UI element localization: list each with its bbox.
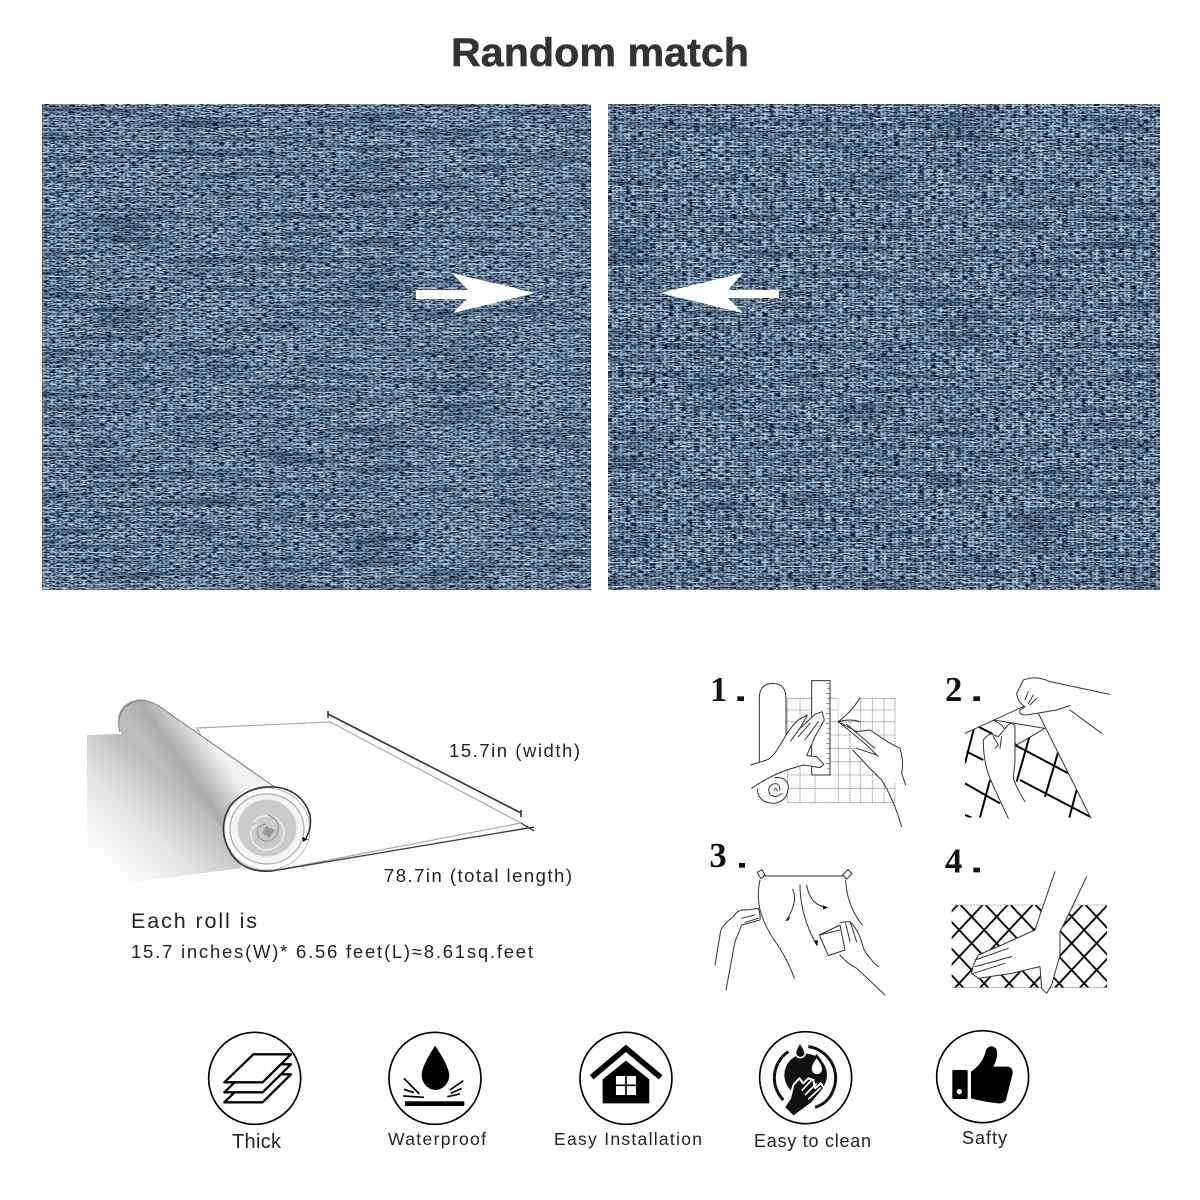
panel: left wallpaper swatch	[42, 104, 591, 590]
title: Random match	[451, 31, 749, 75]
step 3: smooth on wall: 3	[709, 837, 727, 875]
text block: roll size: Each roll is	[131, 909, 257, 933]
step 1: measure and cut: 1	[710, 671, 727, 709]
step 1: measure and cut	[710, 671, 906, 827]
arrow: pointing right	[416, 273, 535, 313]
label: easy to clean: Easy to clean	[754, 1131, 871, 1151]
step 2: peel backing	[945, 671, 1110, 818]
icon: easy to clean	[760, 1032, 852, 1124]
step 3: smooth on wall	[709, 837, 885, 995]
label: easy installation: Easy Installation	[554, 1129, 702, 1149]
step 2: peel backing: 2	[945, 671, 962, 709]
label: waterproof: Waterproof	[388, 1129, 486, 1149]
arrow: pointing left	[660, 273, 779, 313]
label: safty: Safty	[962, 1128, 1007, 1148]
icon: easy installation	[580, 1032, 672, 1124]
label: thick: Thick	[232, 1131, 282, 1153]
step 4: press flat: 4	[945, 842, 962, 880]
icon: safty	[937, 1031, 1029, 1123]
roll diagram	[87, 700, 580, 886]
panel: right wallpaper swatch	[608, 104, 1160, 590]
label: width: 15.7in (width)	[449, 740, 580, 761]
text block: roll size	[131, 909, 533, 962]
label: total length: 78.7in (total length)	[384, 865, 572, 886]
icon: waterproof	[389, 1032, 481, 1124]
text block: roll size: 15.7 inches(W)* 6.56 feet(L)≈8.61sq.feet	[131, 941, 533, 962]
icon: thick	[209, 1032, 301, 1124]
step 4: press flat	[945, 842, 1107, 993]
